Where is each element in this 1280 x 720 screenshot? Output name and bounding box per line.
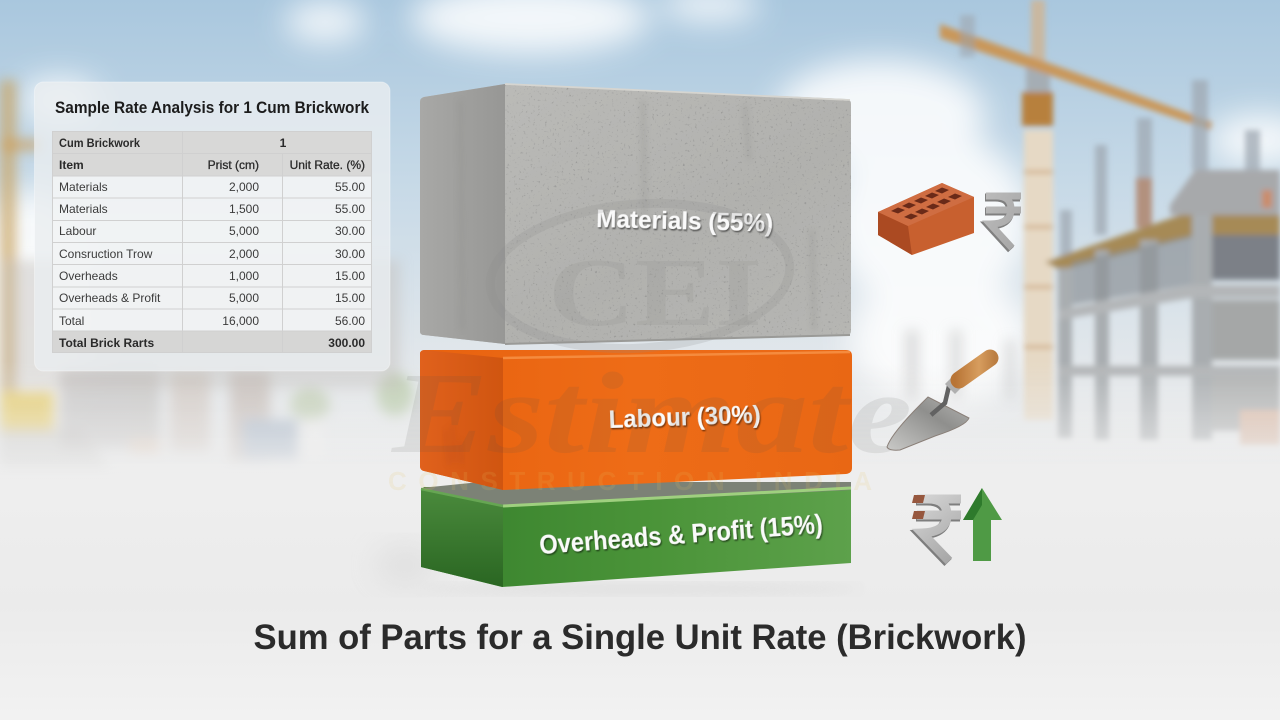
rate analysis table: Labour	[59, 224, 96, 238]
rate analysis table: 300.00	[328, 336, 365, 350]
rate analysis table: 15.00	[335, 269, 365, 283]
icon: trowel	[887, 358, 990, 450]
rate analysis table: Consruction Trow	[59, 247, 153, 261]
rate analysis table: Cum Brickwork	[59, 136, 140, 150]
watermark: CEI Estimate logo: CEI	[548, 239, 762, 347]
icon: brick	[878, 183, 974, 255]
rate analysis table: 2,000	[229, 180, 259, 194]
block: overheads and profit	[421, 482, 851, 587]
icon: rupee symbol with up arrow	[912, 488, 1002, 562]
block: materials: Materials (55%)	[596, 205, 774, 238]
rate analysis table: Prist (cm)	[208, 158, 259, 172]
rate analysis table: Total Brick Rarts	[59, 336, 154, 350]
rate analysis table: 30.00	[335, 224, 365, 238]
watermark: CEI Estimate logo: CONSTRUCTION INDIA	[388, 466, 872, 496]
rate analysis table: Overheads & Profit	[59, 291, 161, 305]
rate analysis table: Materials	[59, 180, 108, 194]
block: overheads and profit: Overheads & Profit (15%)	[538, 509, 824, 560]
rate analysis table: 1	[280, 136, 287, 150]
rate analysis table: 1,500	[229, 202, 259, 216]
rate analysis table: 55.00	[335, 180, 365, 194]
rate analysis table: Total	[59, 314, 84, 328]
block: materials	[420, 84, 851, 344]
rate analysis table: 5,000	[229, 291, 259, 305]
rate analysis table: Item	[59, 158, 84, 172]
rate analysis table: 55.00	[335, 202, 365, 216]
icon: rupee symbol, silver	[985, 196, 1021, 250]
watermark: CEI Estimate logo: Estimate	[391, 350, 912, 478]
block: labour	[420, 350, 852, 490]
rate analysis table: 16,000	[222, 314, 259, 328]
rate analysis table: 5,000	[229, 224, 259, 238]
rate analysis table: Overheads	[59, 269, 118, 283]
rate analysis table: Materials	[59, 202, 108, 216]
rate analysis table: 2,000	[229, 247, 259, 261]
rate analysis table	[52, 131, 372, 353]
table heading: Sample Rate Analysis for 1 Cum Brickwork	[55, 99, 370, 117]
rate analysis table: 56.00	[335, 314, 365, 328]
stacked brick blocks	[420, 84, 852, 587]
panel: sample rate analysis table	[34, 82, 390, 371]
rate analysis table: 1,000	[229, 269, 259, 283]
block: labour: Labour (30%)	[608, 401, 761, 434]
rate analysis table: 15.00	[335, 291, 365, 305]
watermark: CEI Estimate logo	[388, 194, 912, 496]
rate analysis table: Unit Rate. (%)	[290, 158, 365, 172]
main title: Sum of Parts for a Single Unit Rate (Brickwork)	[254, 618, 1026, 657]
rate analysis table: 30.00	[335, 247, 365, 261]
